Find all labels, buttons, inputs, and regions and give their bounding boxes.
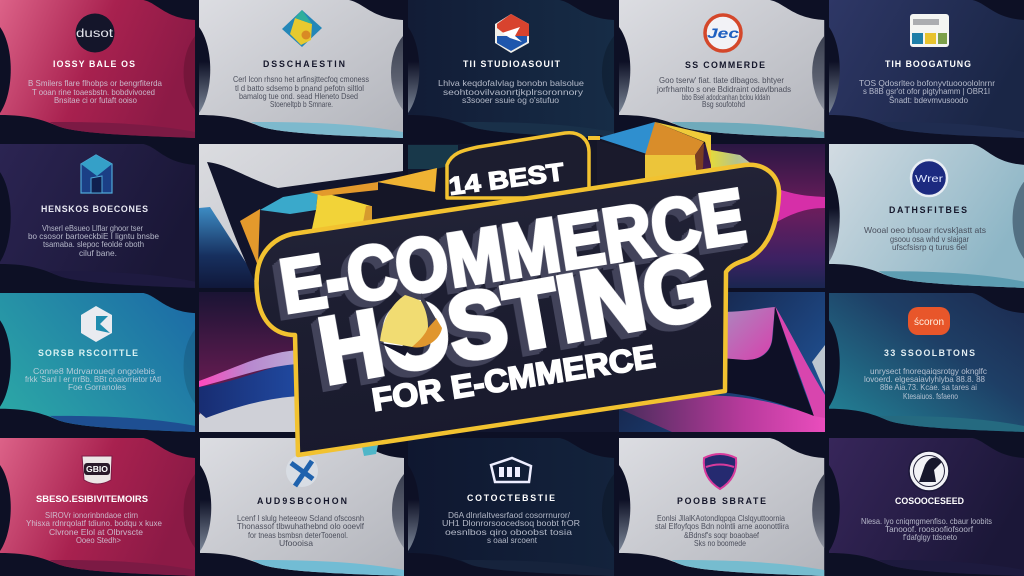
panel: lower teal sliver — [362, 445, 378, 456]
main banner — [256, 165, 779, 455]
text block: Bnsitae ci or futaft ooiso — [54, 96, 137, 105]
text block: unrysect fnoreqaiqsrotgy oknglfc — [870, 367, 987, 376]
subtitle: for e-commerce: FOR E-CMMERCE — [370, 338, 658, 418]
icon: white chart card logo — [910, 14, 949, 47]
title: hosting: HOSTING — [311, 232, 719, 404]
panel: center upper left artwork — [199, 144, 403, 288]
panel: center top backdrop — [408, 144, 619, 288]
panel: center lower left artwork — [199, 292, 299, 432]
text block — [442, 511, 580, 545]
text block — [438, 79, 585, 105]
icon: blue box logo — [81, 155, 112, 193]
text block: bo csosor bartoeckbiE I ligntu bnsbe — [28, 232, 159, 241]
heading: AUD9SBCOHON — [257, 496, 347, 506]
panel: card row 4 col 5 — [829, 438, 1024, 576]
icon: dark ribbon behind banner — [300, 135, 700, 240]
text block: Yhisxa rdnrqolatf tdiuno. bodqu x kuxe — [26, 519, 162, 528]
text block: Goo tserw' fiat. tlate dlbagos. bhtyer — [659, 76, 784, 85]
icon: navy round logo — [911, 160, 947, 196]
text block — [26, 511, 162, 545]
panel: center upper right artwork — [619, 144, 825, 288]
text block — [237, 514, 365, 548]
text block: D6A dlnrlaItvesrfaod cosorrnuror/ — [448, 511, 571, 520]
heading: DATHSFITBES — [889, 205, 967, 215]
text block: Bsg soufotohd — [702, 100, 745, 109]
text block: stal Elfoyfqos Bdn nolntli arne aoonottlira — [655, 522, 789, 531]
icon: dark round logo — [76, 14, 114, 52]
text block: bamalog tue ond. sead Hleneto Dsed — [239, 92, 358, 101]
icon: navy round logo: Wrer — [915, 174, 944, 185]
icon: blue yellow gem logo — [282, 10, 322, 47]
text block — [859, 79, 995, 105]
icon: white round bird logo — [909, 451, 949, 491]
text block: TOS Qdosrlteo bofonyvtuoooololnrnr — [859, 79, 995, 88]
text block: Cerl Icon rhsno het arfinsjttecfoq cmoness — [233, 75, 369, 84]
title: e-commerce: E-COMMERCE — [274, 173, 751, 330]
badge: 14 best — [447, 133, 600, 201]
text block — [655, 514, 789, 548]
icon: orange cloud logo — [908, 307, 950, 335]
label: 14 best: 14 BEST — [447, 158, 566, 201]
panel: card row 2 col 1 — [0, 144, 195, 288]
heading: TIH BOOGATUNG — [885, 59, 971, 69]
text block: oesnlbos qiro oboobst tosia — [445, 528, 573, 537]
heading: COSOOCESEED — [895, 496, 964, 506]
text block: Wooal oeo bfuoar rlcvsk]astt ats — [864, 226, 986, 235]
heading: TII STUDIOASOUIT — [463, 59, 561, 69]
text block: Ŝnadt: bdevmvusoodo — [889, 96, 968, 105]
text block — [656, 76, 791, 109]
heading: SORSB RSCOITTLE — [38, 348, 138, 358]
text block: Stoeneltpb b Smnare. — [270, 100, 333, 109]
text block: B Smilers flare flhobps or bengrfiterda — [28, 79, 162, 88]
panel: card row 1 col 1 — [0, 0, 195, 138]
text block: s3sooer ssuie og o'stufuo — [462, 96, 560, 105]
panel: card row 4 col 3 — [408, 438, 614, 576]
panel: card row 1 col 5 — [829, 0, 1024, 138]
heading: SS COMMERDE — [685, 60, 765, 70]
icon: red blue hexagon logo — [495, 14, 529, 53]
text block — [864, 367, 987, 401]
panel: center teal corner — [408, 145, 458, 169]
text block — [233, 75, 369, 109]
heading: IOSSY BALE OS — [53, 59, 135, 69]
text block — [28, 224, 159, 258]
panel: card row 4 col 1 — [0, 438, 195, 576]
text block: lovoerd. elgesaiavlyhlyba 88.8. 88 — [864, 375, 985, 384]
text block: Nlesa. lyo cniqmgmenfiso. cbaur loobits — [861, 517, 992, 526]
icon: dark round logo: dusot — [76, 26, 114, 40]
icon: blue cross logo — [286, 455, 318, 487]
icon: white badge logo — [82, 456, 112, 484]
text block: bbo Bsel adodcanhan bclou kldaln — [682, 93, 770, 102]
text block: s oaal srcoent — [487, 536, 538, 545]
text block — [861, 517, 992, 542]
panel: card row 1 col 4 — [619, 0, 824, 138]
text block: Eonlsi JllalKAotondlqpqa Clslqyuttoornia — [657, 514, 785, 523]
panel: card row 4 col 4 — [619, 438, 824, 576]
heading: HENSKOS BOECONES — [41, 204, 148, 214]
text block: f'dafglgy tdsoeto — [903, 533, 957, 542]
icon: red ring logo — [705, 15, 741, 51]
heading: 33 SSOOLBTONS — [884, 348, 975, 358]
panel: card row 2 col 5 — [829, 144, 1024, 288]
text block: ciluf bane. — [79, 249, 117, 258]
text block: tsamaba. slepoc feolde oboth — [43, 240, 144, 249]
text block: Ktesaiuos. fsfaeno — [903, 392, 958, 401]
text block: tl d batto sdsemo b pnand pefotn siltlol — [235, 84, 364, 93]
text block: ufscfsisrp q turus 6el — [892, 243, 967, 252]
text block: 88e Aia.73. Kcae. sa tares ai — [880, 383, 977, 392]
text block: Lcenf I slulg heteeow Scland ofscosnh — [237, 514, 364, 523]
text block: Conne8 Mdrvaroueql ongolebis — [33, 367, 155, 376]
panel: card row 3 col 1 — [0, 293, 195, 432]
text block: Ufoooisa — [279, 539, 314, 548]
text block: frkk 'Sanl I er rrrBb. BBt coaiorrietor tAtl — [25, 375, 161, 384]
text block — [28, 79, 162, 105]
text block: SIROVr ionorinbndaoe ctirn — [45, 511, 138, 520]
text block: seohtoovilvaonrtjkplrsoronnory — [443, 88, 584, 97]
text block — [864, 226, 986, 252]
text block: T ooan rine toaesbstn. bobdvivoced — [32, 88, 155, 97]
icon: white striped house logo — [491, 458, 531, 482]
text block — [25, 367, 161, 392]
icon: pink shield logo — [704, 454, 736, 489]
text block: Clvrone Elol at Olbrvscte — [49, 528, 144, 537]
text block: jorfrhamlto s one Bdidraint odavlbnads — [656, 85, 791, 94]
text block: Lhlva keqdofaIvlag bonobn balsolue — [438, 79, 585, 88]
heading: POOBB SBRATE — [677, 496, 766, 506]
panel: center lower backdrop — [408, 292, 619, 432]
heading: COTOCTEBSTIE — [467, 493, 555, 503]
icon: left gem — [240, 182, 378, 268]
text block: s B8B gsr'ot ofor plgtyhamm | OBR1I — [863, 87, 990, 96]
panel: center lower right artwork — [619, 292, 825, 432]
icon: white badge logo: GBIO — [86, 465, 108, 474]
text block: Thonassof tlbwuhathebnd olo ooevlf — [237, 522, 365, 531]
text block: Ooeo Stedh> — [76, 536, 121, 545]
text block: gsoou osa whd v slaigar — [890, 235, 969, 244]
panel: card row 4 col 2 — [200, 438, 404, 576]
icon: right gem — [597, 122, 762, 192]
panel: card row 3 col 5 — [829, 293, 1024, 432]
heading: SBESO.ESIBIVITEMOIRS — [36, 494, 148, 504]
text block: Vhserl eBsueo Llflar ghoor tser — [42, 224, 143, 233]
text block: Tanooof. roosoofiofsoorf — [885, 525, 974, 534]
icon: red ring logo: Jec — [707, 25, 739, 41]
icon: white hexagon logo — [81, 306, 112, 342]
panel: card row 1 col 2 — [199, 0, 403, 138]
text block: Sks no boomede — [694, 539, 746, 548]
text block: &Bdnsf's soqr boaobaef — [684, 531, 760, 540]
heading: DSSCHAESTIN — [263, 59, 345, 69]
text block: Foe Gorranoles — [68, 383, 126, 392]
icon: orange facet — [377, 168, 437, 192]
panel: card row 1 col 3 — [408, 0, 614, 138]
text block: UH1 Dlonrorsoocedsoq boobt frOR — [442, 519, 580, 528]
icon: orange cloud logo: ścoron — [914, 317, 944, 328]
icon: yellow cone inside the O — [380, 293, 442, 356]
text block: for tneas bsmbsn deterTooenol. — [248, 531, 348, 540]
